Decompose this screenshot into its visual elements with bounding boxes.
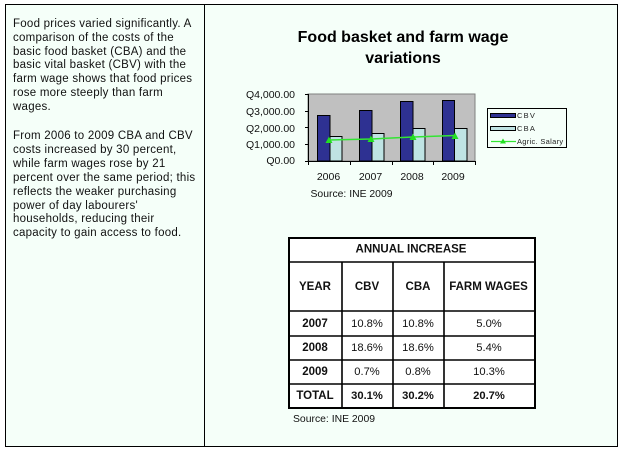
table row labels [296,318,334,402]
table values: 30.1% [351,390,383,402]
text block: left column: percent over the same period; this [13,172,195,184]
table values: 18.6% [402,342,434,354]
text block: left column: wages. [13,101,51,113]
table header: YEAR [299,281,332,293]
y axis labels: Q0.00 [266,155,295,167]
table values: 0.8% [405,366,431,378]
x axis labels: 2007 [359,171,382,183]
table values: 30.2% [402,390,434,402]
x axis labels: 2008 [400,171,424,183]
table values: 18.6% [351,342,383,354]
table values: 5.0% [476,318,502,330]
title [298,29,508,67]
text block: left column: households, reducing their [13,213,154,225]
text block: left column: Food prices varied significantly. A [13,18,192,30]
table row labels: TOTAL [296,390,334,402]
table header: FARM WAGES [449,281,528,293]
table values: 5.4% [476,342,502,354]
x axis labels [317,171,465,183]
legend: CBV [517,111,536,120]
text block: left column: From 2006 to 2009 CBA and CBV [13,130,193,142]
text block: left column: farm wage shows that food prices [13,73,192,85]
plot area [308,94,475,161]
text block: left column: reflects the weaker purchasing [13,186,176,198]
table values: 20.7% [473,390,505,402]
table values: 10.8% [351,318,383,330]
text block: left column: power of day labourers' [13,200,138,212]
text block: left column: rose more steeply than farm [13,87,163,99]
x axis labels: 2009 [441,171,465,183]
table header: ANNUAL INCREASE [356,244,467,256]
table row labels: 2008 [302,342,328,354]
table header [299,244,528,293]
y axis labels: Q2,000.00 [246,123,295,135]
table row labels: 2009 [302,366,328,378]
text block: left column: capacity to gain access to food. [13,227,181,239]
y axis labels: Q4,000.00 [246,89,295,101]
legend [488,108,566,148]
legend: Agric. Salary [517,137,563,146]
table row labels: 2007 [302,318,328,330]
table values: 0.7% [354,366,380,378]
axes [305,94,476,165]
y axis labels: Q1,000.00 [246,139,295,151]
table source: Source: INE 2009 [293,414,375,425]
text block: left column: basic vital basket (CBV) with the [13,59,186,71]
text block: left column: costs increased by 30 percent, [13,144,176,156]
legend: CBA [517,124,536,133]
line: Agric. Salary [326,132,458,143]
table values: 10.3% [473,366,505,378]
bars: CBV [318,100,454,161]
table header: CBV [355,281,379,293]
x axis labels: 2006 [317,171,340,183]
title: variations [365,50,441,67]
table values [351,318,505,402]
text block: left column: basic food basket (CBA) and the [13,46,186,58]
chart source: Source: INE 2009 [310,189,393,200]
text block: left column: while farm wages rose by 21 [13,158,165,170]
y axis labels [246,89,295,167]
table header: CBA [406,281,430,293]
text block: left column [13,18,195,239]
text block: left column: comparison of the costs of the [13,32,174,44]
y axis labels: Q3,000.00 [246,106,295,118]
table values: 10.8% [402,318,434,330]
bars: CBA [330,128,467,161]
title: Food basket and farm wage [298,29,508,46]
